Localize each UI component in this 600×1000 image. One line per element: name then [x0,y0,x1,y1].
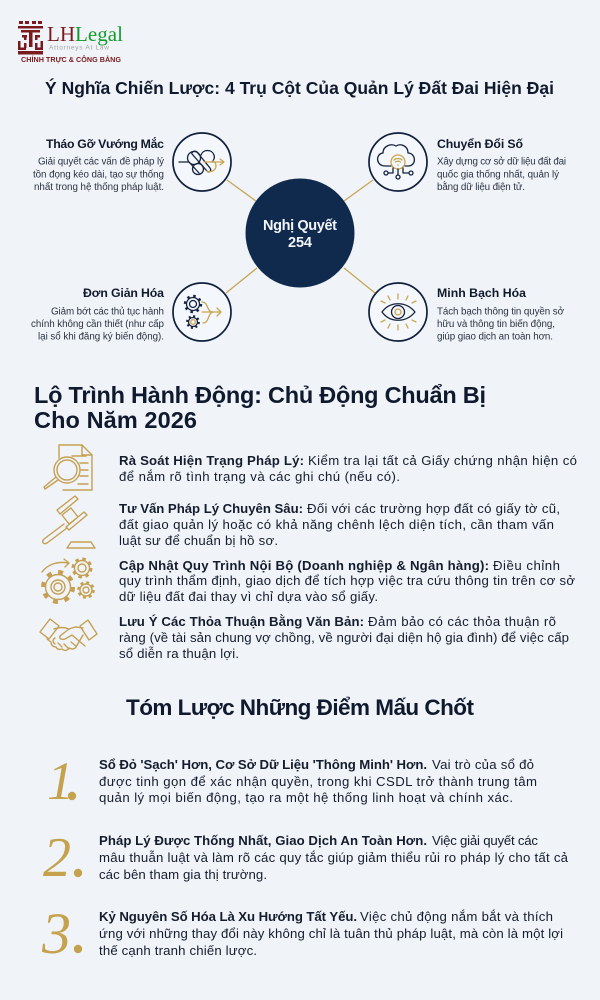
logo tagline: CHÍNH TRỰC & CÔNG BẰNG [21,55,121,64]
text: Minh Bạch Hóa: hữu và thông tin biến động, [437,319,555,330]
icon: logo tower [18,21,43,54]
text: takeaway 1 [99,757,537,805]
text: Chuyển Đổi Số: quốc gia thống nhất, quản lý [437,170,559,180]
text: Đơn Giản Hóa [31,286,165,342]
panel: hub diagram [31,133,566,342]
text: update internal process: quy trình thẩm định, giao dịch để tích hợp việc tra cứu thông tin trên cơ sở [119,573,575,588]
text: takeaway 3: Kỷ Nguyên Số Hóa Là Xu Hướng Tất Yếu. [99,909,357,924]
text: Đơn Giản Hóa: Giảm bớt các thủ tục hành [51,306,164,318]
text: update internal process: Điều chỉnh [493,558,560,573]
heading: key takeaways: Tóm Lược Những Điểm Mấu Chốt [126,695,474,720]
text: legal consultation: Tư Vấn Pháp Lý Chuyên Sâu: [119,501,303,516]
number 3: 3 [41,901,71,966]
text: review legal status: để nắm rõ tình trạng và các ghi chú (nếu có). [119,469,400,484]
icon: handshake [40,619,97,650]
logo wordmark: LHLegal [47,22,123,46]
text: legal consultation: Đối với các trường hợp đất có giấy tờ cũ, [307,501,560,516]
text: Tháo Gỡ Vướng Mắc: tồn đọng kéo dài, tạo sự thống [33,170,164,180]
text: legal consultation: luật sư để chuẩn bị hồ sơ. [119,533,278,548]
text: written agreements: ràng (về tài sản chung vợ chồng, về người đại diện hộ gia đình) để việc cấp [119,630,569,645]
text: takeaway 2: Pháp Lý Được Thống Nhất, Giao Dịch An Toàn Hơn. [99,833,427,848]
heading: action roadmap [34,382,486,433]
text: Tháo Gỡ Vướng Mắc [33,136,164,193]
text: Minh Bạch Hóa: Minh Bạch Hóa [437,286,526,300]
text: takeaway 1: Vai trò của sổ đỏ [432,757,534,772]
text: Tháo Gỡ Vướng Mắc: Giải quyết các vấn đề pháp lý [38,156,164,168]
panel: key takeaways list [41,751,569,966]
central hub: 254 [288,235,312,251]
text: takeaway 2: mâu thuẫn luật và làm rõ các quy tắc giúp giảm thiểu rủi ro pháp lý cho tất cả [99,850,569,865]
icon: simplify gears [173,283,231,341]
icon: gavel [43,496,95,548]
text: Minh Bạch Hóa: giúp giao dịch an toàn hơn. [437,332,553,342]
icon: transparency eye [369,283,427,341]
text: Tháo Gỡ Vướng Mắc: Tháo Gỡ Vướng Mắc [46,136,164,151]
text: legal consultation [119,501,560,548]
text: review legal status: Kiểm tra lại tất cả Giấy chứng nhận hiện có [308,453,577,468]
central hub [246,178,354,288]
panel: action list [40,445,577,661]
text: Minh Bạch Hóa: Tách bạch thông tin quyền sở [437,306,565,318]
text: takeaway 3: thế cạnh tranh chiến lược. [99,943,257,958]
text: review legal status: Rà Soát Hiện Trạng Pháp Lý: [119,453,304,468]
text: update internal process: Cập Nhật Quy Trình Nội Bộ (Doanh nghiệp & Ngân hàng): [119,558,489,573]
icon: document and magnifier [44,445,92,490]
number 1: 1 [47,751,74,811]
icon: gears [42,559,94,602]
text: Tháo Gỡ Vướng Mắc: nhất trong hệ thống pháp luật. [34,182,164,193]
number 2: 2 [43,827,71,889]
text: written agreements: sổ diễn ra thuận lợi. [119,646,239,661]
text: takeaway 1: quản lý mọi biến động, tạo ra một hệ thống linh hoạt và chính xác. [99,790,513,805]
connector lines [226,180,375,293]
text: legal consultation: đất giao quản lý hoặc có khả năng chênh lệch diện tích, cần tham vấn [119,517,554,532]
title: Ý Nghĩa Chiến Lược: 4 Trụ Cột Của Quản Lý Đất Đai Hiện Đại [45,77,554,98]
text: Chuyển Đổi Số: bằng dữ liệu điện tử. [437,182,525,193]
central hub: Nghị Quyết [263,218,337,234]
text: written agreements: Lưu Ý Các Thỏa Thuận Bằng Văn Bản: [119,614,364,629]
text: update internal process: dữ liệu đất đai thay vì chỉ dựa vào sổ giấy. [119,589,378,604]
text: Chuyển Đổi Số: Xây dựng cơ sở dữ liệu đất đai [437,156,566,168]
text: takeaway 3 [99,909,563,958]
heading: action roadmap: Cho Năm 2026 [34,407,197,433]
icon: digital cloud [369,133,427,191]
text: takeaway 2 [99,833,569,882]
text: written agreements: Đảm bảo có các thỏa thuận rõ [368,614,556,629]
text: takeaway 2: các bên tham gia thị trường. [99,867,267,882]
text: takeaway 2: Việc giải quyết các [432,833,538,848]
text: Đơn Giản Hóa: chính không cần thiết (như cấp [31,319,165,330]
logo [18,21,123,64]
text: takeaway 3: Việc chủ động nắm bắt và thích [360,909,553,924]
text: review legal status [119,453,577,484]
logo subtitle: Attorneys At Law [49,44,109,52]
text: Chuyển Đổi Số: Chuyển Đổi Số [437,137,523,151]
text: Đơn Giản Hóa: Đơn Giản Hóa [83,286,164,300]
text: Minh Bạch Hóa [437,286,565,342]
text: update internal process [119,558,575,604]
text: written agreements [119,614,569,661]
text: takeaway 1: được tinh gọn để xác nhận quyền, trong khi CSDL trở thành trung tâm [99,774,537,789]
icon: untangle knot [173,133,231,191]
heading: action roadmap: Lộ Trình Hành Động: Chủ Động Chuẩn Bị [34,382,486,408]
text: takeaway 3: ứng với những thay đổi này không chỉ là tuân thủ pháp luật, mà còn là một lợi [99,926,563,941]
text: Chuyển Đổi Số [437,137,566,193]
text: takeaway 1: Sổ Đỏ 'Sạch' Hơn, Cơ Sở Dữ Liệu 'Thông Minh' Hơn. [99,757,427,772]
text: Đơn Giản Hóa: lại sổ khi đăng ký biến động). [38,332,164,342]
